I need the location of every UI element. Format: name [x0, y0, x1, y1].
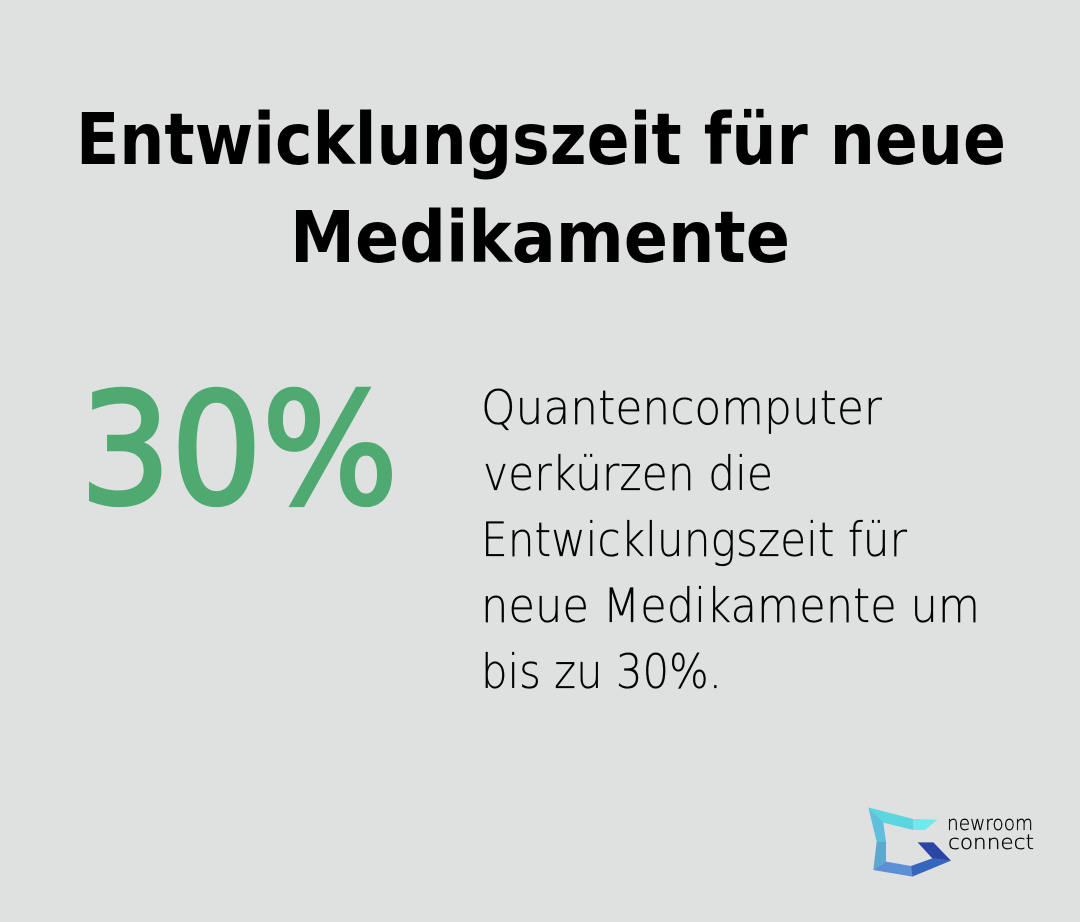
- description text: bis zu 30%.: [481, 645, 722, 700]
- logo: newroom connect: [868, 807, 1034, 877]
- logo icon: [868, 807, 951, 877]
- logo wordmark: newroom: [947, 811, 1033, 835]
- description text: Quantencomputer: [481, 381, 883, 436]
- logo wordmark: [947, 811, 1034, 854]
- description text: verkürzen die: [483, 447, 773, 502]
- logo wordmark: connect: [948, 830, 1034, 854]
- title: [76, 98, 1006, 279]
- big statistic: 30%: 30%: [80, 361, 398, 540]
- description text: Entwicklungszeit für: [481, 513, 908, 568]
- description text: [481, 381, 980, 700]
- title: Medikamente: [290, 196, 790, 279]
- description text: neue Medikamente um: [481, 579, 980, 634]
